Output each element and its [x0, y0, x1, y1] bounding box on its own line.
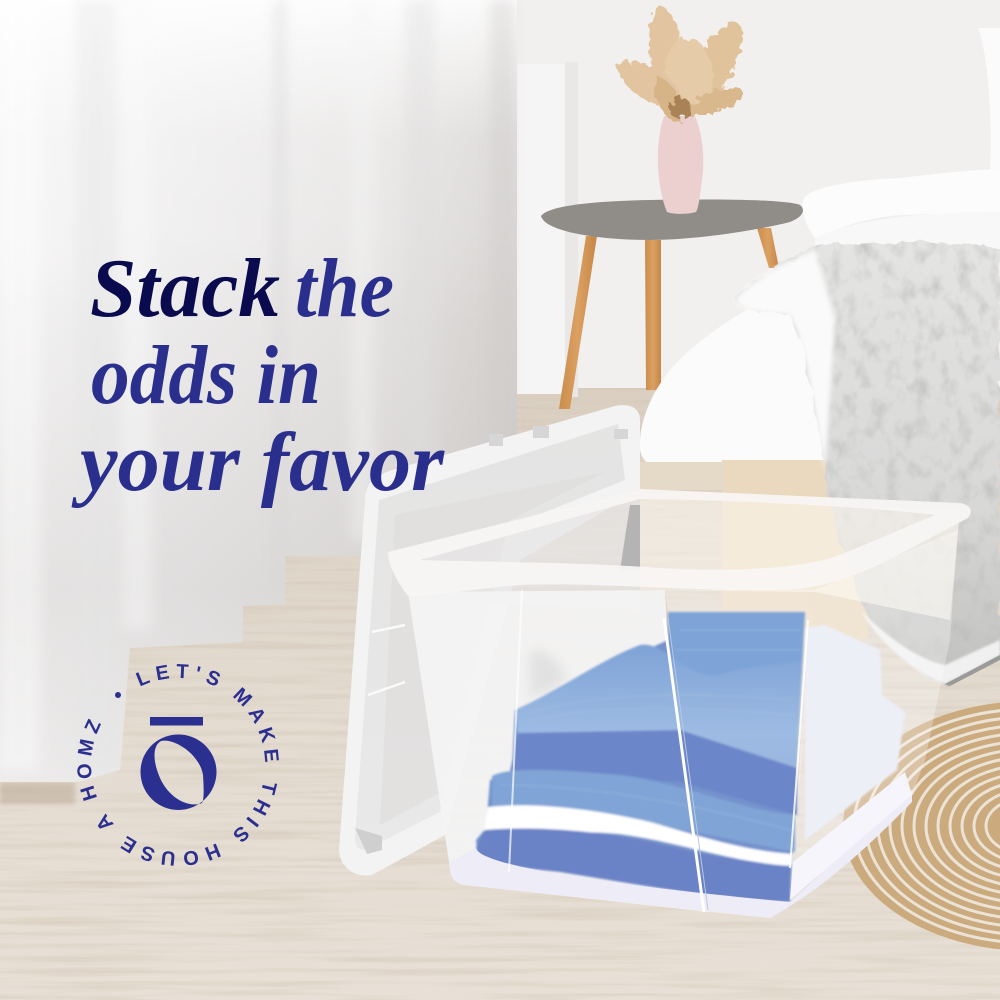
bin front right panel — [665, 590, 815, 918]
folded blue clothes — [476, 612, 905, 902]
circular tagline: LET'S MAKE THIS HOUSE A HOMZ — [77, 664, 279, 866]
brand mark: bar — [150, 717, 203, 726]
headline — [71, 242, 445, 509]
white bed and pillow — [640, 28, 1000, 640]
sheer curtains — [0, 0, 517, 782]
dot — [115, 692, 121, 698]
brand mark: o — [140, 734, 216, 810]
headline line 3: your favor — [71, 416, 445, 509]
clear storage bin — [388, 489, 971, 918]
side table — [541, 200, 803, 409]
pillow — [640, 290, 830, 470]
headline: the — [295, 242, 394, 335]
bin back interior — [395, 489, 640, 610]
table legs — [559, 228, 779, 409]
dried pampas grass — [611, 4, 753, 126]
wood floor — [0, 388, 1000, 1000]
knit sweater — [515, 645, 802, 770]
lid clips — [355, 426, 628, 854]
wall background — [0, 0, 1000, 420]
lower sweater — [492, 770, 795, 852]
bin front left panel — [408, 590, 709, 912]
grey fur throw — [735, 242, 1000, 686]
circular brand badge — [77, 664, 279, 866]
bin right side — [790, 530, 958, 880]
knit ribs — [500, 630, 800, 830]
storage bin lid leaning — [339, 405, 640, 876]
white layer — [484, 805, 792, 866]
dark band — [510, 730, 797, 815]
top sweater — [668, 612, 805, 700]
bottom sweater — [476, 828, 790, 902]
side panel — [515, 62, 578, 397]
jute rug — [843, 701, 1000, 951]
upper duvet — [803, 169, 1000, 238]
frosted bottom tray — [449, 790, 912, 918]
table top — [541, 200, 803, 240]
headline line 2: odds in — [91, 329, 321, 422]
front seam highlight — [664, 618, 704, 912]
curtain panel — [0, 0, 517, 782]
pink vase — [658, 116, 703, 214]
curtain folds — [0, 0, 514, 770]
headline line 1: Stack — [90, 242, 280, 335]
bed wood base — [722, 460, 868, 640]
bin rim — [388, 489, 971, 596]
white ghost sweaters beyond seam — [805, 625, 905, 840]
blue clothes base — [476, 612, 805, 902]
